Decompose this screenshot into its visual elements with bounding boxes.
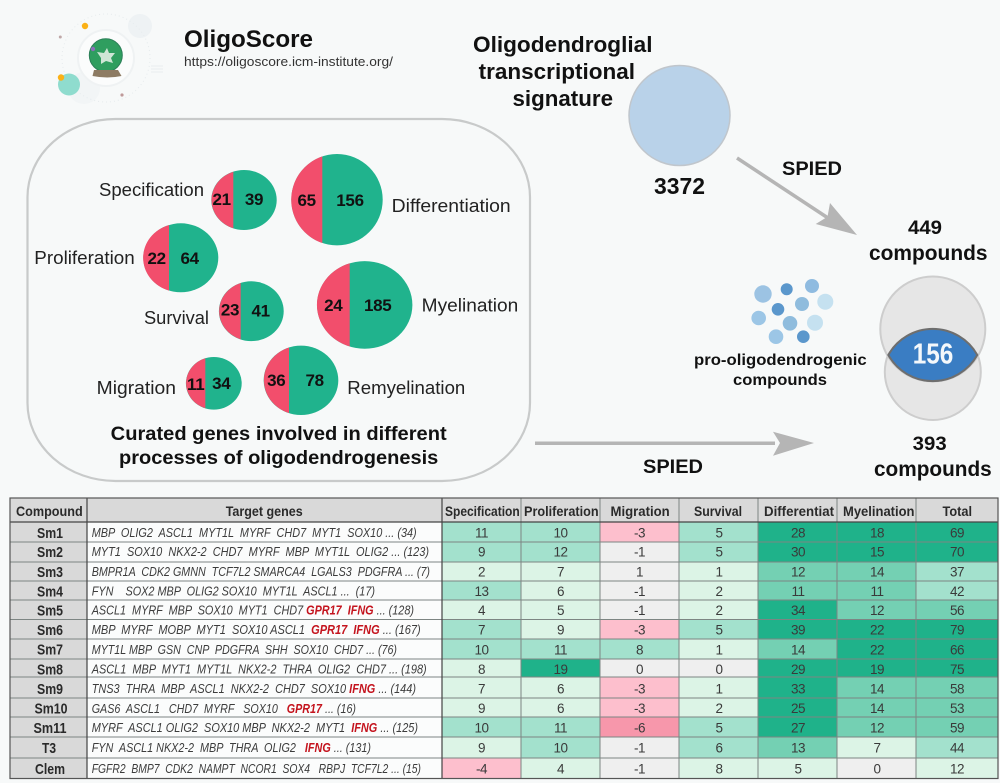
bubble: Proliferation: 22	[148, 249, 166, 268]
label: 393 compounds	[874, 434, 992, 481]
row: Sm9: 14	[870, 682, 885, 696]
bubble: Specification: 39	[245, 190, 263, 209]
row: Sm5	[10, 600, 998, 620]
bubble: Remyelination: 36	[267, 371, 285, 390]
title: OligoScore: OligoScore	[184, 26, 313, 53]
row: Sm1: 10	[553, 526, 568, 540]
row: Sm3: Sm3	[37, 564, 63, 581]
row: Sm11	[10, 717, 998, 737]
label: SPIED lower: SPIED	[643, 457, 703, 478]
row: Sm8: ASCL1 MBP MYT1 MYT1L NKX2-2 THRA OLIG2 CHD7 ... (198)	[91, 662, 427, 676]
row: Sm7: 1	[715, 642, 723, 658]
row: Sm5: 2	[715, 603, 723, 618]
table header: Total	[942, 503, 972, 519]
row: Sm9: 1	[715, 682, 723, 696]
row: T3: FYN ASCL1 NKX2-2 MBP THRA OLIG2 IFNG ... (131)	[92, 740, 371, 755]
table header	[10, 498, 998, 522]
row: Sm10: GAS6 ASCL1 CHD7 MYRF SOX10 GPR17 ... (16)	[92, 701, 356, 716]
row: Sm2: MYT1 SOX10 NKX2-2 CHD7 MYRF MBP MYT1L OLIG2 ... (123)	[92, 544, 429, 559]
bubble: Differentiation	[291, 154, 511, 245]
venn intersection	[888, 329, 977, 381]
row: T3: 7	[873, 740, 881, 756]
bubble: Specification: Specification	[99, 179, 204, 200]
label: pro-oligodendrogenic compounds	[694, 352, 867, 389]
signature circle	[629, 66, 730, 166]
label: 393 compounds: compounds	[874, 458, 992, 481]
row: T3: 44	[950, 740, 965, 756]
row: Sm6: 79	[950, 622, 964, 638]
row: Clem: 5	[794, 762, 802, 776]
row: Sm11: 27	[791, 720, 805, 736]
row: Sm1: 28	[791, 526, 805, 540]
number: signature size: 3372	[654, 173, 705, 199]
bubble: Myelination: 24	[324, 296, 343, 315]
row: Sm5: 34	[791, 603, 806, 618]
row: Sm10: 2	[715, 701, 723, 716]
bubble: Survival: Survival	[144, 307, 209, 328]
panel caption: Curated genes involved in different	[111, 424, 447, 445]
row: Sm7: Sm7	[37, 642, 63, 658]
row: Sm1: 11	[475, 526, 488, 540]
row: Sm9: 6	[557, 682, 564, 696]
row: Sm8: 8	[478, 662, 485, 677]
row: Sm5: 4	[478, 603, 486, 618]
label: pro-oligodendrogenic compounds: compounds	[733, 372, 827, 389]
row: Sm3: 37	[950, 564, 964, 580]
row: Sm8: 0	[715, 662, 723, 677]
row: Sm8: 75	[950, 662, 964, 677]
row: Sm5: 56	[950, 603, 964, 618]
bubble: Remyelination: 78	[306, 371, 324, 390]
row: Sm3: BMPR1A CDK2 GMNN TCF7L2 SMARCA4 LGALS3 PDGFRA ... (7)	[92, 564, 430, 579]
bubble: Survival: 41	[252, 302, 270, 320]
bubble: Proliferation	[34, 223, 218, 292]
row: Sm1: -3	[634, 526, 645, 540]
row: Clem: 4	[557, 762, 565, 776]
table header: Specification	[445, 503, 520, 519]
bubble: Remyelination	[264, 346, 465, 415]
heading: oligodendroglial transcriptional signature: Oligodendroglial	[473, 32, 652, 57]
row: Sm1: 18	[870, 526, 884, 540]
bubble: Migration: 11	[187, 375, 204, 394]
row: Sm4: 6	[557, 584, 564, 599]
row: Sm7: MYT1L MBP GSN CNP PDGFRA SHH SOX10 CHD7 ... (76)	[92, 642, 397, 657]
row: Sm7: 8	[636, 642, 643, 658]
row: Sm1: Sm1	[37, 525, 63, 542]
row: Sm7: 22	[870, 642, 884, 658]
row: Sm2: 9	[478, 544, 485, 560]
row: Sm7: 66	[950, 642, 964, 658]
row: Sm1: MBP OLIG2 ASCL1 MYT1L MYRF CHD7 MYT1 SOX10 ... (34)	[92, 525, 417, 540]
row: Sm9: 7	[478, 682, 485, 696]
venn diagram	[880, 276, 985, 420]
row: Sm4: 11	[791, 584, 805, 599]
row: Sm6: 9	[557, 622, 564, 638]
row: Sm9: -3	[634, 682, 645, 696]
bubble: Migration: 34	[212, 374, 231, 393]
row: Sm9: 58	[950, 682, 964, 696]
bubble: Migration: Migration	[97, 377, 176, 398]
table header: Proliferation	[524, 503, 599, 519]
row: Sm7: 10	[474, 642, 489, 658]
row: Sm6: 5	[715, 622, 723, 638]
row: Clem: -4	[476, 762, 488, 776]
row: Sm10: 25	[791, 701, 805, 716]
table header: Target genes	[226, 503, 303, 519]
row: Sm1: 5	[715, 526, 723, 540]
row: Sm4: 2	[715, 584, 723, 599]
row: Sm10: -3	[634, 701, 645, 716]
row: Sm5: 12	[870, 603, 884, 618]
row: Sm11: 12	[870, 720, 884, 736]
row: Sm2: Sm2	[37, 544, 63, 561]
row: T3: 13	[791, 740, 805, 756]
label: 449 compounds: 449	[908, 218, 942, 239]
row: Sm6: MBP MYRF MOBP MYT1 SOX10 ASCL1 GPR17 IFNG ... (167)	[92, 622, 421, 637]
heading: oligodendroglial transcriptional signature: signature	[512, 86, 613, 111]
row: Sm6: Sm6	[37, 622, 63, 639]
row: Sm8: Sm8	[37, 661, 63, 678]
table header: Survival	[694, 503, 742, 519]
label: pro-oligodendrogenic compounds: pro-oligodendrogenic	[694, 352, 867, 369]
row: Sm2: 70	[950, 544, 964, 560]
heading: oligodendroglial transcriptional signature	[473, 32, 652, 111]
row: Sm10: 14	[870, 701, 885, 716]
row: Sm11: 10	[474, 720, 489, 736]
row: T3	[10, 737, 998, 758]
table header: Myelination	[843, 503, 914, 519]
label: 449 compounds: compounds	[869, 242, 988, 265]
row: Sm5: -1	[634, 603, 645, 618]
row: Sm4: FYN SOX2 MBP OLIG2 SOX10 MYT1L ASCL1 ... (17)	[92, 584, 375, 598]
row: Clem: -1	[634, 762, 645, 776]
row: Sm4: 11	[870, 584, 884, 599]
row: Clem	[10, 758, 998, 778]
row: Clem: FGFR2 BMP7 CDK2 NAMPT NCOR1 SOX4 RBPJ TCF7L2 ... (15)	[92, 761, 421, 776]
bubble: Myelination	[317, 261, 518, 349]
label: 449 compounds	[869, 218, 988, 265]
row: Sm10: 6	[557, 701, 564, 716]
row: Sm6: 7	[478, 622, 485, 638]
bubble: Proliferation: Proliferation	[34, 247, 135, 268]
bubble: Survival	[144, 281, 284, 341]
row: T3: 6	[715, 740, 723, 756]
row: Sm6: 39	[791, 622, 805, 638]
panel caption	[111, 424, 447, 469]
label: 393 compounds: 393	[913, 434, 947, 455]
row: Clem: Clem	[35, 761, 65, 778]
row: Sm7: 14	[791, 642, 806, 658]
row: Sm9	[10, 677, 998, 698]
row: Sm3: 1	[715, 564, 723, 580]
row: T3: 9	[478, 740, 485, 756]
row: Sm11: 5	[715, 720, 723, 736]
arrow: signature to compounds	[737, 158, 857, 235]
row: Sm8	[10, 659, 998, 678]
row: Clem: 8	[715, 762, 723, 776]
row: Sm4: -1	[634, 584, 645, 599]
row: Sm4: 13	[474, 584, 489, 599]
row: Sm7: 11	[554, 642, 567, 658]
row: Sm3: 12	[791, 564, 805, 580]
bubble: Survival: 23	[221, 300, 239, 320]
icon: OligoScore crystal ball logo	[58, 14, 163, 104]
row: Sm11: -6	[634, 720, 645, 736]
table header: Migration	[610, 503, 670, 519]
row: T3: T3	[42, 740, 56, 757]
row: Sm3: 14	[870, 564, 885, 580]
row: Sm4: Sm4	[37, 583, 64, 600]
row: Sm9: TNS3 THRA MBP ASCL1 NKX2-2 CHD7 SOX10 IFNG ... (144)	[92, 681, 416, 696]
row: Sm11: Sm11	[34, 720, 66, 737]
row: Sm10: Sm10	[34, 700, 68, 717]
bubble: Migration	[97, 357, 242, 410]
row: Sm2: -1	[634, 544, 645, 560]
text: website URL: https://oligoscore.icm-institute.org/	[184, 55, 394, 69]
row: Sm5: 5	[557, 603, 564, 618]
row: Sm8: 19	[553, 662, 568, 677]
bubble: Remyelination: Remyelination	[347, 377, 465, 398]
row: Sm3: 7	[557, 564, 564, 580]
row: Sm2: 12	[553, 544, 568, 560]
row: Sm11: 59	[950, 720, 964, 736]
row: Sm4	[10, 581, 998, 600]
row: Sm8: 29	[791, 662, 805, 677]
row: Sm8: 0	[636, 662, 643, 677]
row: Sm11: MYRF ASCL1 OLIG2 SOX10 MBP NKX2-2 MYT1 IFNG ... (125)	[92, 720, 418, 735]
row: T3: 10	[553, 740, 568, 756]
row: T3: -1	[634, 740, 645, 756]
row: Sm3	[10, 562, 998, 581]
row: Sm2: 30	[791, 544, 805, 560]
row: Sm10	[10, 698, 998, 717]
row: Sm6	[10, 620, 998, 639]
row: Sm1: 69	[950, 526, 964, 540]
label: SPIED upper: SPIED	[782, 159, 842, 180]
bubble: Differentiation: Differentiation	[392, 195, 511, 216]
icon: compound dots cluster	[751, 279, 833, 344]
row: Sm9: 33	[791, 682, 805, 696]
bubble: Myelination: 185	[364, 296, 391, 315]
heading: oligodendroglial transcriptional signature: transcriptional	[479, 59, 635, 84]
bubble: Proliferation: 64	[181, 249, 200, 268]
row: Sm3: 2	[478, 564, 485, 580]
row: Sm2	[10, 542, 998, 562]
row: Sm2: 5	[715, 544, 723, 560]
table header: Differentiat	[764, 503, 834, 519]
row: Sm11: 11	[554, 720, 567, 736]
table header: Compound	[16, 503, 83, 519]
number: overlap: 156	[913, 338, 953, 370]
row: Sm9: Sm9	[37, 681, 63, 698]
row: Sm4: 42	[950, 584, 964, 599]
arrow: lower SPIED	[535, 432, 814, 456]
row: Sm3: 1	[636, 564, 643, 580]
bubble: Specification: 21	[213, 190, 231, 209]
panel: curated genes	[28, 119, 530, 481]
bubble: Differentiation: 65	[298, 191, 316, 210]
row: Sm6: 22	[870, 622, 884, 638]
bubble: Differentiation: 156	[336, 191, 364, 210]
panel outline	[28, 119, 530, 481]
row: Sm5: ASCL1 MYRF MBP SOX10 MYT1 CHD7 GPR17 IFNG ... (128)	[91, 602, 414, 618]
row: Sm2: 15	[870, 544, 884, 560]
row: Sm10: 53	[950, 701, 964, 716]
bubble: Specification	[99, 170, 277, 230]
row: Sm7	[10, 639, 998, 659]
row: Sm5: Sm5	[37, 602, 63, 619]
row: Sm10: 9	[478, 701, 485, 716]
row: Clem: 12	[950, 762, 964, 776]
row: Sm8: 19	[870, 662, 884, 677]
row: Sm1	[10, 522, 998, 542]
panel caption: processes of oligodendrogenesis	[119, 448, 438, 469]
bubble: Myelination: Myelination	[422, 295, 518, 316]
table: compound scores	[10, 498, 998, 778]
row: Clem: 0	[873, 762, 881, 776]
row: Sm6: -3	[634, 622, 645, 638]
